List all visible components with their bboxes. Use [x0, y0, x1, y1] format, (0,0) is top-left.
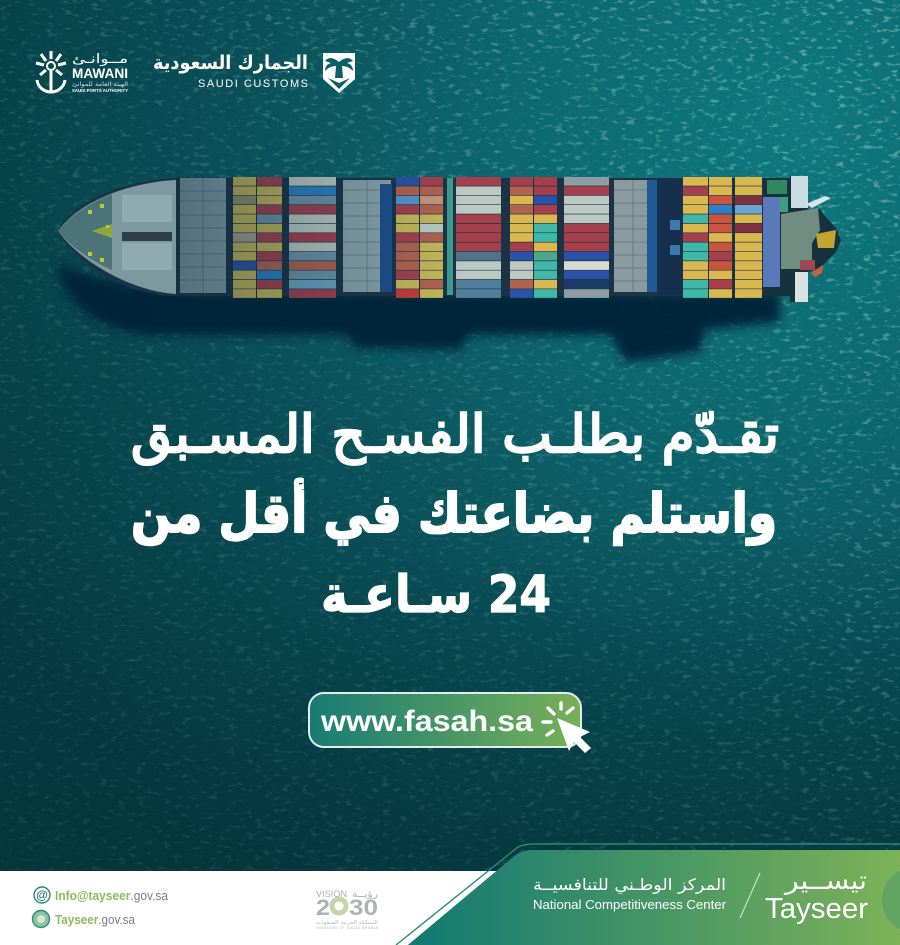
- bow deck: [58, 180, 176, 294]
- icon: cursor arrow: [557, 718, 591, 753]
- logo: Vision 2030: 2: [316, 895, 330, 920]
- container stacks: [233, 177, 256, 298]
- stern superstructure: [763, 176, 841, 302]
- footer: [0, 844, 900, 945]
- footer white band: [0, 871, 497, 945]
- headline line 1: تقـدّم بطلـب الفسـح المسـبق: [131, 405, 779, 465]
- logo: Vision 2030: رؤيــة: [352, 890, 378, 900]
- headline line 2: واستلم بضاعتك في أقل من: [131, 478, 777, 545]
- hatch covers forward: [180, 178, 657, 293]
- logo: Vision 2030: 30: [349, 895, 378, 920]
- customs English name: SAUDI CUSTOMS: [198, 78, 308, 90]
- Mawani English name: MAWANI: [72, 66, 128, 81]
- email text: Info@tayseer.gov.sa: [55, 888, 169, 903]
- logo: Vision 2030: المملكة العربية السعودية: [316, 920, 378, 926]
- logo: Saudi Customs: [153, 52, 355, 93]
- center English name: National Competitiveness Center: [533, 898, 726, 912]
- icon: click rays: [543, 703, 573, 735]
- website button: [309, 693, 591, 753]
- authority Arabic name: الهيئة العامة للموانئ: [72, 81, 128, 88]
- shield icon: [323, 53, 355, 93]
- Tayseer English wordmark: Tayseer: [765, 893, 868, 925]
- contact: email: [34, 887, 169, 903]
- ship shadow: [58, 262, 780, 362]
- footer green panel: [396, 844, 900, 945]
- hatch seams: [180, 178, 657, 293]
- anchor and sun icon: [36, 51, 66, 92]
- website text: Tayseer.gov.sa: [55, 912, 136, 927]
- headline: [131, 405, 779, 625]
- icon: globe: [32, 910, 50, 928]
- authority English name: SAUDI PORTS AUTHORITY: [72, 88, 128, 93]
- divider slash: [740, 873, 760, 918]
- logo: Vision 2030: [316, 889, 378, 930]
- headline line 3: 24 سـاعـة: [321, 566, 551, 625]
- button pill: [309, 693, 581, 747]
- logo: Mawani: [36, 51, 128, 93]
- customs Arabic name: الجمارك السعودية: [153, 52, 308, 74]
- logo: Vision 2030: VISION: [316, 889, 347, 899]
- center Arabic name: المركز الوطـني للتنافسيــة: [533, 875, 726, 895]
- container ship: [57, 176, 841, 302]
- icon: at sign: @: [36, 888, 48, 902]
- website URL: www.fasah.sa: [320, 705, 533, 738]
- ship hull and bow: [57, 178, 780, 296]
- logo: Vision 2030: KINGDOM OF SAUDI ARABIA: [316, 926, 378, 930]
- Tayseer Arabic wordmark: تيســير: [783, 866, 867, 895]
- Mawani Arabic name: مــوانـئ: [72, 52, 128, 67]
- contact: website: [32, 910, 136, 928]
